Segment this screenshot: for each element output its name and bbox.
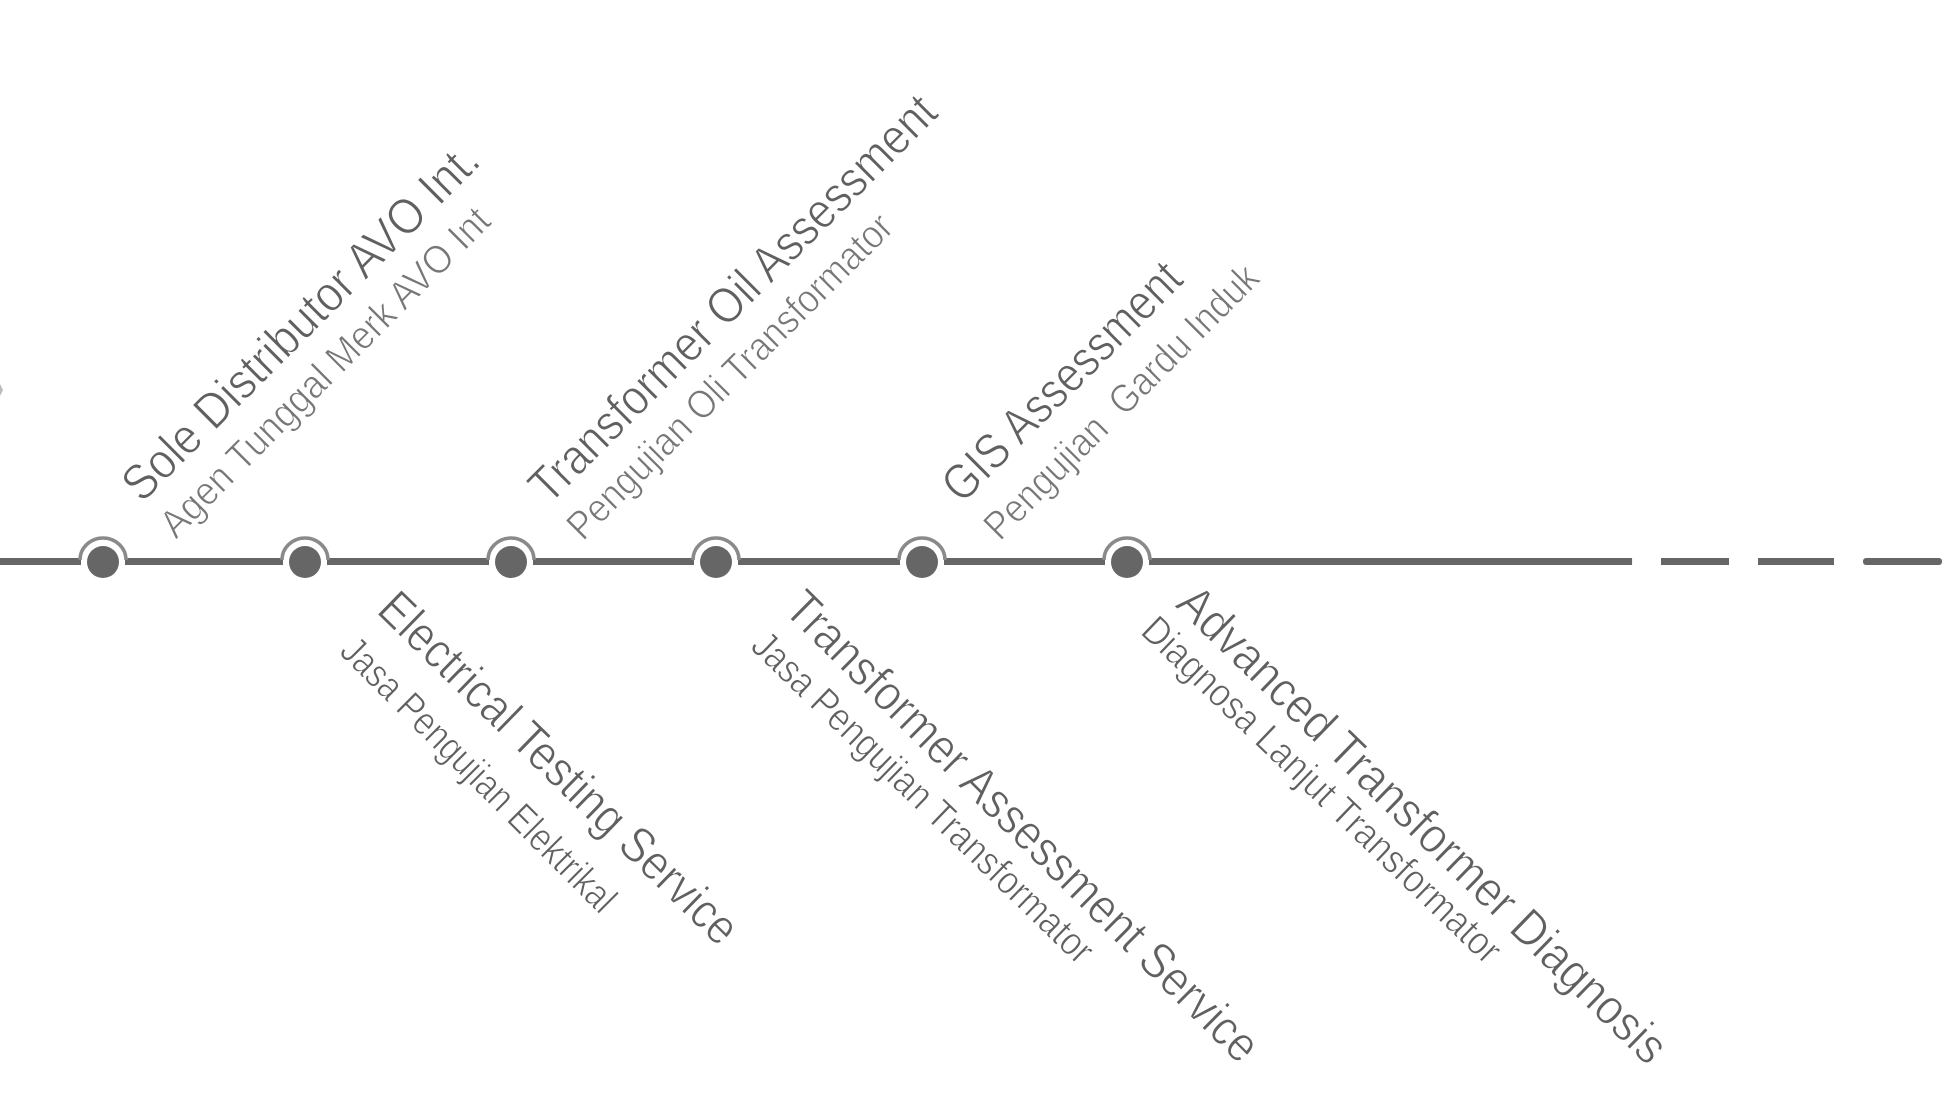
label: GIS Assessment: Pengujian Gardu Induk: [975, 255, 1269, 548]
timeline node 1: [80, 538, 126, 578]
label: Advanced Transformer Diagnosis: Advanced Transformer Diagnosis: [1166, 574, 1679, 1075]
label: Transformer Assessment Service: Jasa Pengujian Transformator: [743, 623, 1103, 973]
label: Electrical Testing Service: Jasa Pengujian Elektrikal: [332, 628, 625, 922]
timeline node 3: [488, 538, 534, 578]
timeline axis with dashed continuation: [0, 558, 1942, 565]
timeline node 4: [693, 538, 739, 578]
label: GIS Assessment: GIS Assessment: [930, 250, 1193, 513]
label: Transformer Oil Assessment: Pengujian Oli Transformator: [558, 205, 902, 548]
timeline node 5: [899, 538, 945, 578]
label: Sole Distributor AVO Int.: Sole Distributor AVO Int.: [110, 131, 491, 512]
label: Advanced Transformer Diagnosis: Diagnosa Lanjut Transformator: [1133, 608, 1510, 972]
label: Transformer Oil Assessment: Transformer Oil Assessment: [517, 83, 948, 514]
timeline node 6: [1104, 538, 1150, 578]
label: Sole Distributor AVO Int.: Agen Tunggal Merk AVO Int: [151, 198, 499, 546]
label: Electrical Testing Service: Electrical Testing Service: [367, 580, 751, 956]
timeline node 2: [282, 538, 328, 578]
